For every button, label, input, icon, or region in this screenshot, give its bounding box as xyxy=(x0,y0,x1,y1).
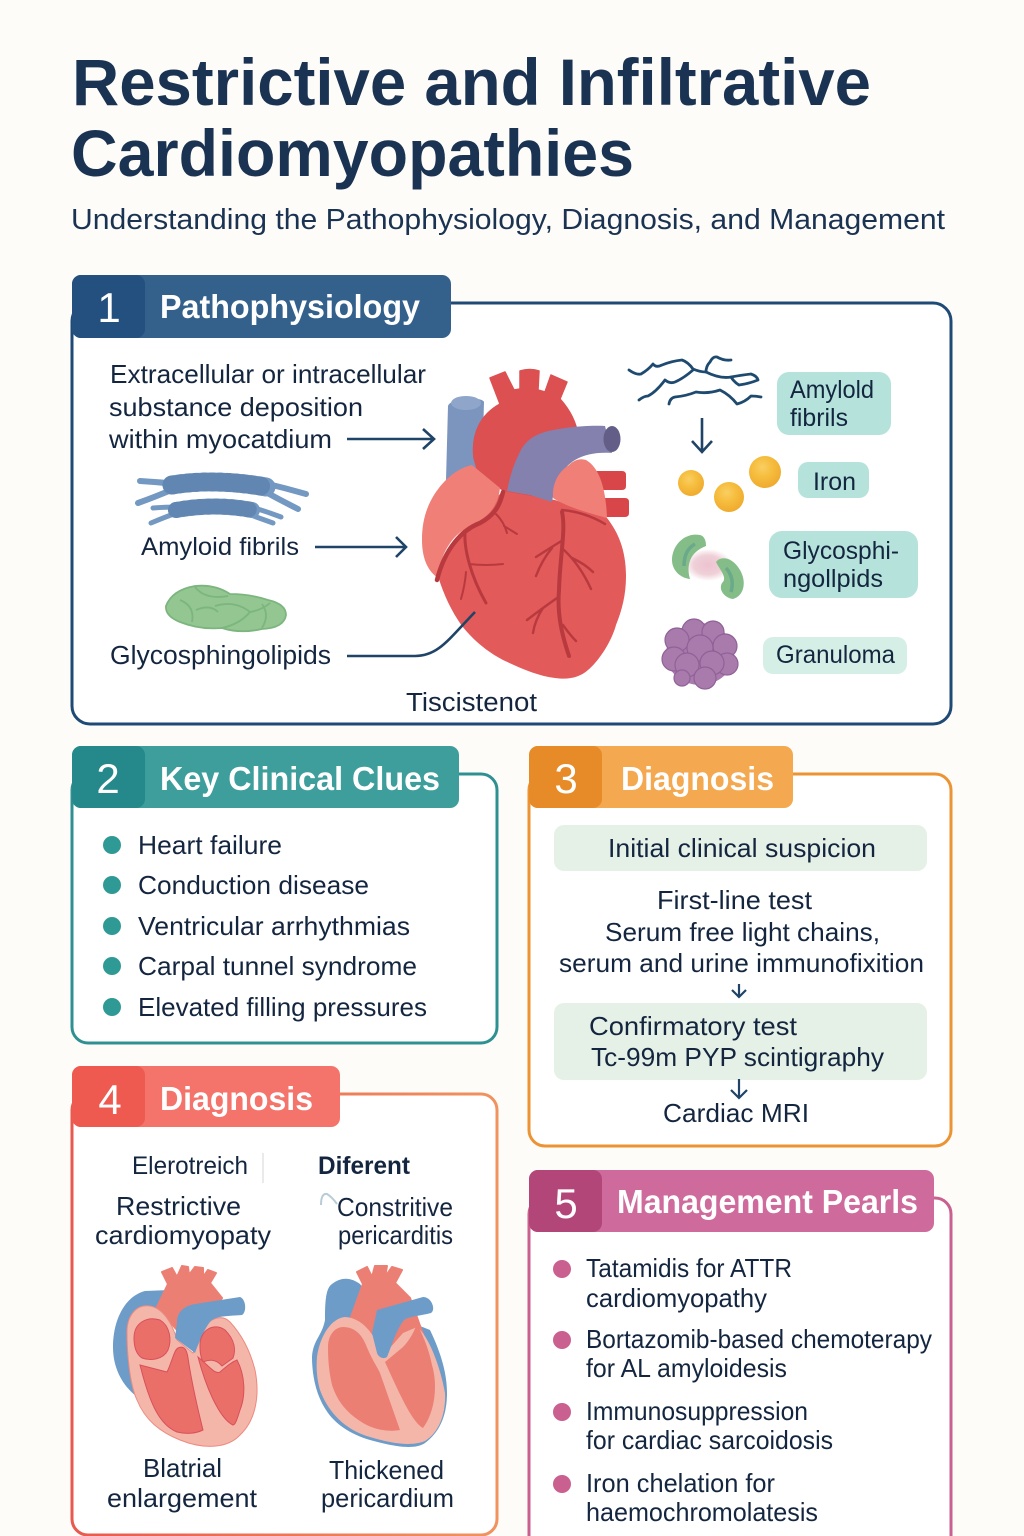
panel: pathophysiology xyxy=(72,275,951,724)
header: differential diagnosis: Diagnosis xyxy=(160,1080,313,1117)
title xyxy=(71,45,871,190)
panel: management pearls xyxy=(529,1170,951,1536)
label: glycosphingolipids: Glycosphingolipids xyxy=(110,642,331,670)
chip: glycosphingolipids: Glycosphi- xyxy=(783,537,899,565)
list: clinical clues xyxy=(103,830,427,1022)
chip: granuloma: Granuloma xyxy=(776,641,895,669)
arrow: to confirmatory test xyxy=(732,984,746,997)
header: diagnosis pathway: 3 xyxy=(554,755,578,802)
header: management pearls xyxy=(529,1170,934,1232)
chip: amyloid fibrils: fibrils xyxy=(790,404,848,432)
panel: key clinical clues xyxy=(72,746,497,1043)
aorta xyxy=(474,370,578,510)
step: confirmatory test xyxy=(554,1003,927,1080)
list: management pearls: haemochromolatesis xyxy=(586,1497,818,1527)
header: management pearls: 5 xyxy=(554,1180,578,1227)
column label: different: Diferent xyxy=(318,1152,411,1180)
chip: iron xyxy=(798,462,869,498)
heading: constrictive pericarditis: Constritive xyxy=(337,1192,453,1222)
column label: elerotreich: Elerotreich xyxy=(132,1152,248,1180)
pulmonary artery xyxy=(507,426,612,502)
panel: differential diagnosis xyxy=(72,1066,497,1535)
pulmonary veins xyxy=(596,471,629,517)
label: heart: Tiscistenot xyxy=(406,689,537,717)
text: deposition description: Extracellular or intracellular xyxy=(110,359,426,389)
list: management pearls: Immunosuppression xyxy=(586,1396,808,1426)
title: Cardiomyopathies xyxy=(71,116,634,190)
list: management pearls: Iron chelation for xyxy=(586,1468,775,1498)
ventricles xyxy=(438,491,626,679)
caption: biatrial enlargement xyxy=(107,1453,258,1513)
subtitle: Understanding the Pathophysiology, Diagnosis, and Management xyxy=(71,204,945,236)
caption: biatrial enlargement: Blatrial xyxy=(143,1453,222,1483)
chip: glycosphingolipids xyxy=(769,531,918,598)
list: management pearls: cardiomyopathy xyxy=(586,1283,767,1313)
coronary vessels xyxy=(437,492,605,656)
header: key clinical clues xyxy=(72,746,459,808)
icon: amyloid fibrils bundle xyxy=(138,481,306,523)
header: differential diagnosis: 4 xyxy=(98,1076,122,1123)
icon: iron spheres xyxy=(678,456,781,512)
list: clinical clues: Heart failure xyxy=(138,830,282,860)
left atrium xyxy=(422,465,500,578)
list: management pearls xyxy=(553,1253,932,1527)
step: first-line test: Serum free light chains, xyxy=(605,917,880,947)
step: initial suspicion: Initial clinical suspicion xyxy=(608,833,876,863)
header: diagnosis pathway xyxy=(529,746,793,808)
heading: constrictive pericarditis xyxy=(337,1192,453,1250)
heading: restrictive cardiomyopathy: Restrictive xyxy=(116,1191,241,1221)
icon: granuloma xyxy=(662,619,738,689)
header: pathophysiology: 1 xyxy=(97,284,121,331)
header: differential diagnosis xyxy=(72,1066,340,1127)
header: pathophysiology xyxy=(72,275,451,338)
list: management pearls: Tatamidis for ATTR xyxy=(586,1253,792,1283)
caption: biatrial enlargement: enlargement xyxy=(107,1483,258,1513)
arrow: amyloid to heart xyxy=(315,537,406,557)
list: management pearls: Bortazomib-based chemoterapy xyxy=(586,1324,932,1354)
label: amyloid fibrils: Amyloid fibrils xyxy=(141,533,299,561)
caption: thickened pericardium: Thickened xyxy=(329,1455,444,1485)
caption: thickened pericardium: pericardium xyxy=(321,1483,454,1513)
list: clinical clues: Elevated filling pressures xyxy=(138,992,427,1022)
chip: granuloma xyxy=(763,637,907,674)
heart: thickened pericardium xyxy=(312,1266,447,1447)
arrow: to cardiac MRI xyxy=(731,1079,747,1098)
list: clinical clues: Conduction disease xyxy=(138,870,369,900)
panel: diagnosis pathway xyxy=(529,746,951,1146)
step: first-line test: First-line test xyxy=(657,885,813,915)
heading: restrictive cardiomyopathy xyxy=(95,1191,271,1250)
chip: amyloid fibrils: Amylold xyxy=(790,376,874,404)
header: diagnosis pathway: Diagnosis xyxy=(621,760,774,797)
header: key clinical clues: Key Clinical Clues xyxy=(160,760,440,797)
step: initial suspicion xyxy=(554,825,927,871)
header: key clinical clues: 2 xyxy=(96,755,120,802)
step: confirmatory test: Confirmatory test xyxy=(589,1011,798,1041)
icon: glycosphingolipid crescents xyxy=(672,535,744,599)
connector: glycosphingolipids to heart xyxy=(347,612,475,656)
caption: thickened pericardium xyxy=(321,1455,454,1513)
right atrium xyxy=(553,459,607,518)
step: first-line test xyxy=(559,885,924,978)
list: management pearls: for cardiac sarcoidosis xyxy=(586,1425,833,1455)
heading: constrictive pericarditis: pericarditis xyxy=(338,1220,453,1250)
list: clinical clues: Carpal tunnel syndrome xyxy=(138,951,417,981)
superior vena cava xyxy=(446,399,484,480)
arrow: deposition to heart xyxy=(347,429,434,449)
heart: biatrial enlargement xyxy=(113,1266,257,1446)
icon: amyloid strands xyxy=(629,357,761,404)
step: confirmatory test: Tc-99m PYP scintigraphy xyxy=(591,1042,884,1072)
icon: glycosphingolipid cluster xyxy=(166,586,286,631)
step: cardiac MRI: Cardiac MRI xyxy=(663,1098,809,1128)
text: deposition description: within myocatdium xyxy=(108,424,332,454)
list: clinical clues: Ventricular arrhythmias xyxy=(138,911,410,941)
heart illustration xyxy=(422,370,629,679)
chip: glycosphingolipids: ngollpids xyxy=(783,565,883,593)
header: management pearls: Management Pearls xyxy=(617,1183,918,1220)
chip: iron: Iron xyxy=(813,468,856,496)
arrow: strands down xyxy=(692,418,712,452)
heading: restrictive cardiomyopathy: cardiomyopaty xyxy=(95,1220,271,1250)
step: first-line test: serum and urine immunofixition xyxy=(559,948,924,978)
header: pathophysiology: Pathophysiology xyxy=(160,288,421,325)
text: deposition description xyxy=(108,359,426,454)
list: management pearls: for AL amyloidesis xyxy=(586,1353,787,1383)
chip: amyloid fibrils xyxy=(777,372,891,435)
title: Restrictive and Infiltrative xyxy=(72,45,871,119)
text: deposition description: substance deposition xyxy=(109,392,363,422)
